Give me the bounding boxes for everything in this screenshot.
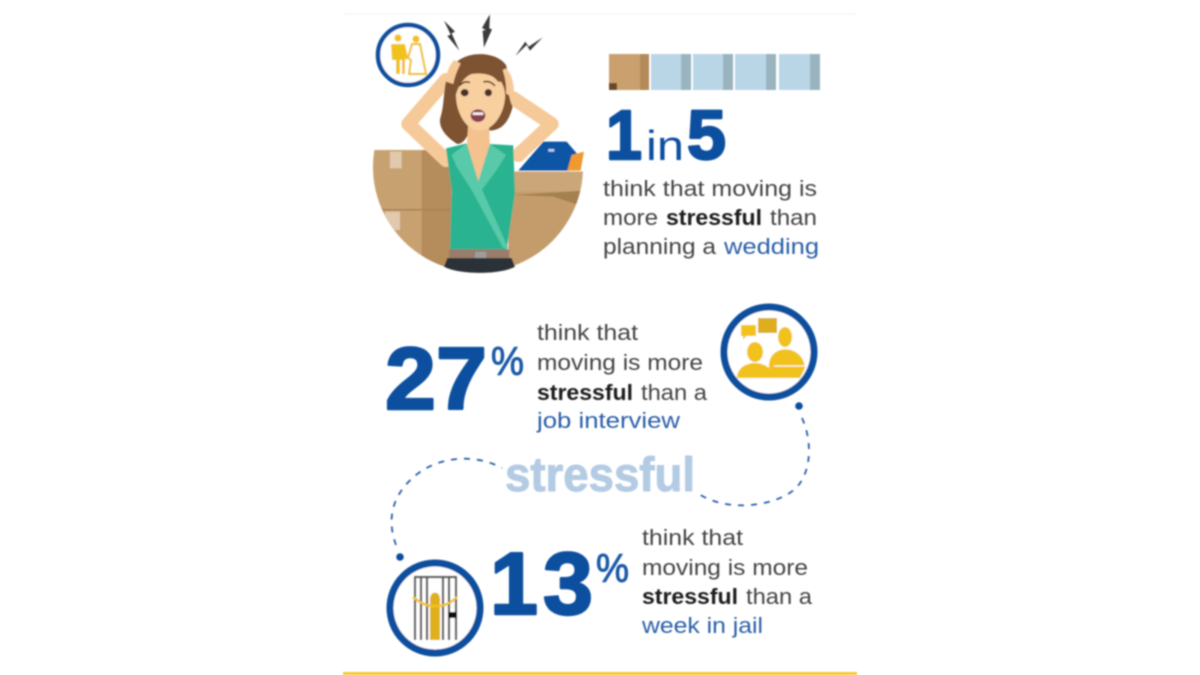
text: job interview comparison: job interview	[536, 408, 680, 433]
text: jail comparison: than a	[746, 584, 813, 609]
text: jail comparison: week in jail	[641, 613, 763, 638]
woman	[408, 54, 552, 273]
text: jail comparison: moving is more	[642, 555, 808, 580]
text: jail comparison	[641, 525, 813, 638]
icon row: 1 of 5 boxes	[609, 54, 820, 90]
text: wedding comparison: more	[603, 205, 658, 230]
text: jail comparison: think that	[642, 525, 743, 550]
text: wedding comparison: planning a	[603, 234, 717, 259]
statistic: 1 in 5: in	[646, 122, 684, 169]
icon: wedding couple	[378, 25, 438, 85]
statistic: 13%: 1	[490, 534, 538, 633]
statistic: 27%: 27	[385, 329, 487, 428]
statistic: 27%: %	[491, 340, 524, 384]
text: wedding comparison: think that moving is	[603, 176, 817, 201]
statistic: 1 in 5: 1	[606, 96, 642, 174]
statistic: 13%: %	[596, 547, 629, 591]
clothes in box	[518, 142, 584, 171]
statistic: 1 in 5	[606, 96, 726, 174]
text: jail comparison: stressful	[642, 584, 738, 609]
text: job interview comparison: think that	[537, 320, 638, 345]
dashed connector: left	[392, 459, 502, 561]
footer rule	[343, 672, 857, 675]
icon: job interview	[724, 307, 814, 397]
text: job interview comparison: moving is more	[537, 350, 703, 375]
icon: jail	[390, 563, 480, 653]
text: job interview comparison: stressful	[537, 380, 633, 405]
text: wedding comparison: wedding	[723, 234, 819, 259]
watermark word: stressful: stressful	[505, 449, 695, 502]
lightning bolts	[444, 14, 543, 56]
illustration: stressed woman with moving boxes	[370, 14, 588, 283]
text: wedding comparison	[603, 176, 819, 259]
statistic: 13%	[490, 534, 629, 633]
statistic: 1 in 5: 5	[687, 96, 726, 174]
dashed connector: right	[699, 402, 809, 505]
statistic: 13%: 3	[543, 534, 593, 633]
text: wedding comparison: than	[770, 205, 817, 230]
text: job interview comparison: than a	[641, 380, 708, 405]
text: job interview comparison	[536, 320, 708, 433]
text: wedding comparison: stressful	[666, 205, 762, 230]
moving boxes	[372, 149, 584, 268]
